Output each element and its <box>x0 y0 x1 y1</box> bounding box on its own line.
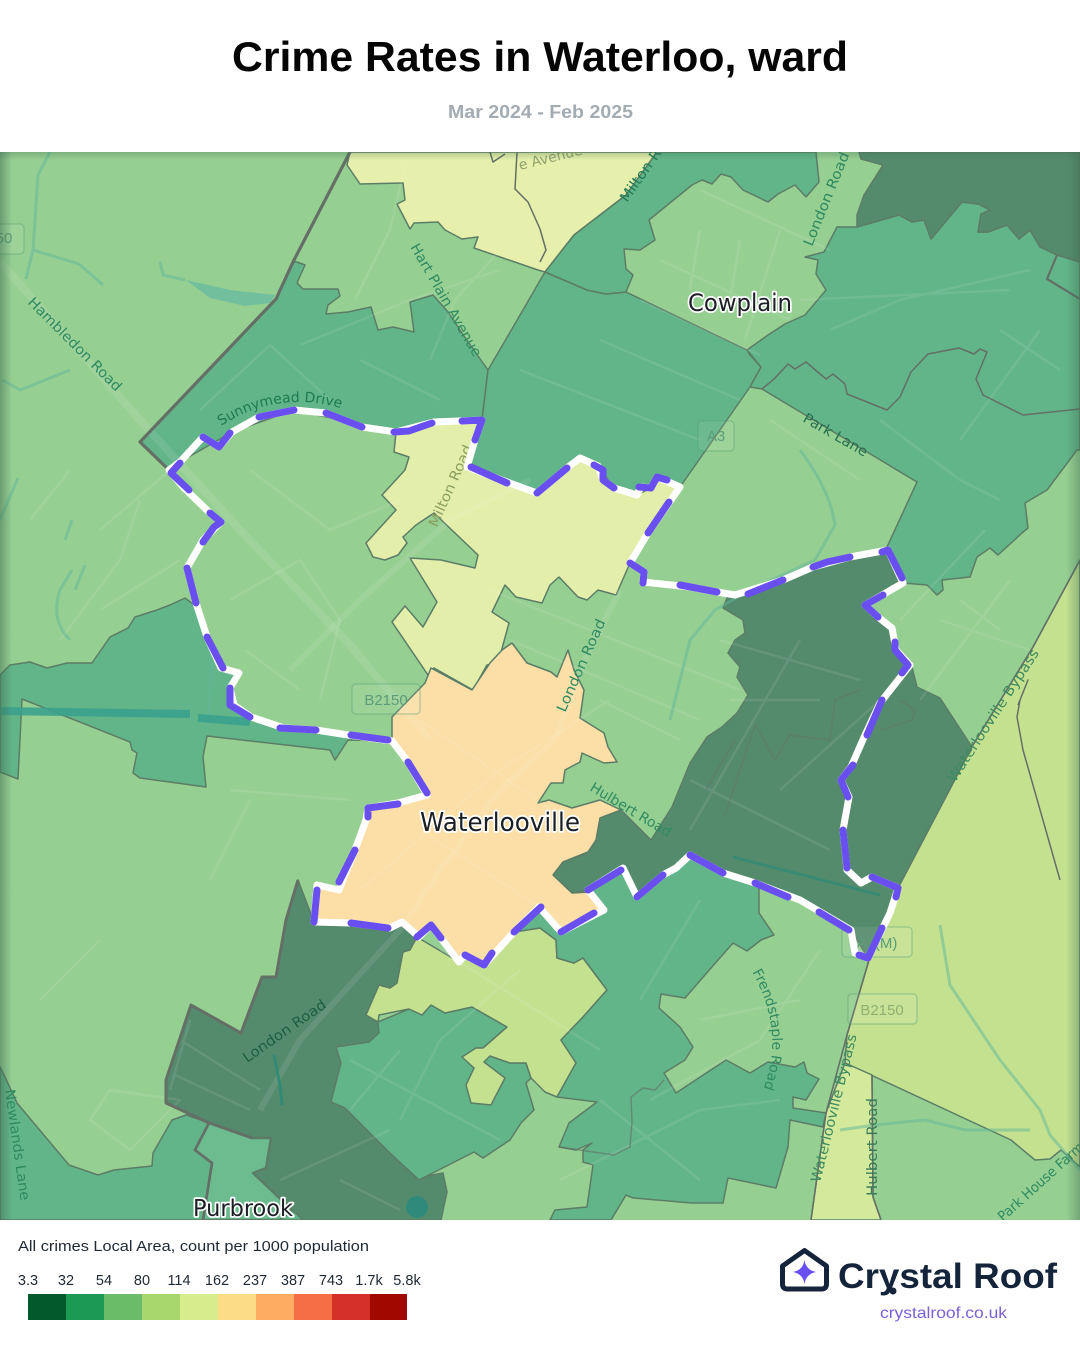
legend values <box>18 1273 421 1289</box>
legend values: 1.7k <box>355 1273 383 1289</box>
road labels: Waterlooville Bypass <box>808 1033 861 1184</box>
legend <box>18 1239 421 1320</box>
legend values: 32 <box>58 1273 74 1289</box>
subtitle: date range: Mar 2024 - Feb 2025 <box>448 101 633 122</box>
road labels: Hart Plain Avenue <box>407 241 484 360</box>
road labels: Hambledon Road <box>24 295 125 395</box>
legend values: 114 <box>167 1273 191 1289</box>
town label: Cowplain: Cowplain <box>688 289 792 317</box>
road labels: Milton Road <box>617 124 681 205</box>
legend values: 5.8k <box>393 1273 421 1289</box>
legend values: 743 <box>319 1273 343 1289</box>
shield labels: A3 <box>707 428 725 445</box>
legend title: All crimes Local Area, count per 1000 population <box>18 1239 369 1255</box>
website: crystalroof.co.uk <box>880 1305 1008 1322</box>
wordmark: Crystal Roof <box>838 1257 1057 1296</box>
road labels: Hulbert Road <box>587 780 674 841</box>
lake <box>186 280 275 306</box>
road labels: e Avenue <box>517 143 584 174</box>
road labels: Waterlooville Bypass <box>945 646 1043 785</box>
town label: Waterlooville: Waterlooville <box>420 808 580 838</box>
road labels: Newlands Lane <box>1 1088 32 1201</box>
legend values: 3.3 <box>18 1273 38 1289</box>
legend values: 387 <box>281 1273 305 1289</box>
map regions <box>0 152 1080 1220</box>
road shields <box>0 224 917 1024</box>
road labels: Park Lane <box>800 411 870 460</box>
road labels: London Road <box>801 150 853 248</box>
road labels: London Road <box>554 617 609 715</box>
icon: house with star <box>782 1250 826 1289</box>
map edge shading <box>0 152 1080 1220</box>
pond <box>406 1196 428 1218</box>
road labels: Hulbert Road <box>865 1098 881 1196</box>
legend values: 237 <box>243 1273 267 1289</box>
title: Crime Rates in Waterloo, ward <box>232 33 848 80</box>
logo: Crystal Roof <box>782 1250 1057 1322</box>
road labels: London Road <box>240 997 330 1066</box>
road labels: Milton Road <box>426 443 476 530</box>
y tail <box>890 1288 896 1294</box>
legend values: 162 <box>205 1273 229 1289</box>
ward boundary <box>169 410 910 965</box>
water features <box>0 152 1080 1170</box>
town label: Purbrook: Purbrook <box>193 1196 294 1222</box>
road network <box>0 165 1060 1210</box>
legend values: 54 <box>96 1273 112 1289</box>
shield labels: B2150 <box>860 1002 904 1019</box>
shield labels <box>0 230 904 1019</box>
road labels: Sunnymead Drive <box>218 391 342 425</box>
shield labels: A3(M) <box>857 935 897 952</box>
extra boundaries <box>140 152 1080 1220</box>
road labels: Frendstaple Road <box>752 968 783 1091</box>
legend colour scale <box>28 1294 407 1320</box>
shield labels: B2150 <box>364 692 408 709</box>
legend values: 80 <box>134 1273 150 1289</box>
